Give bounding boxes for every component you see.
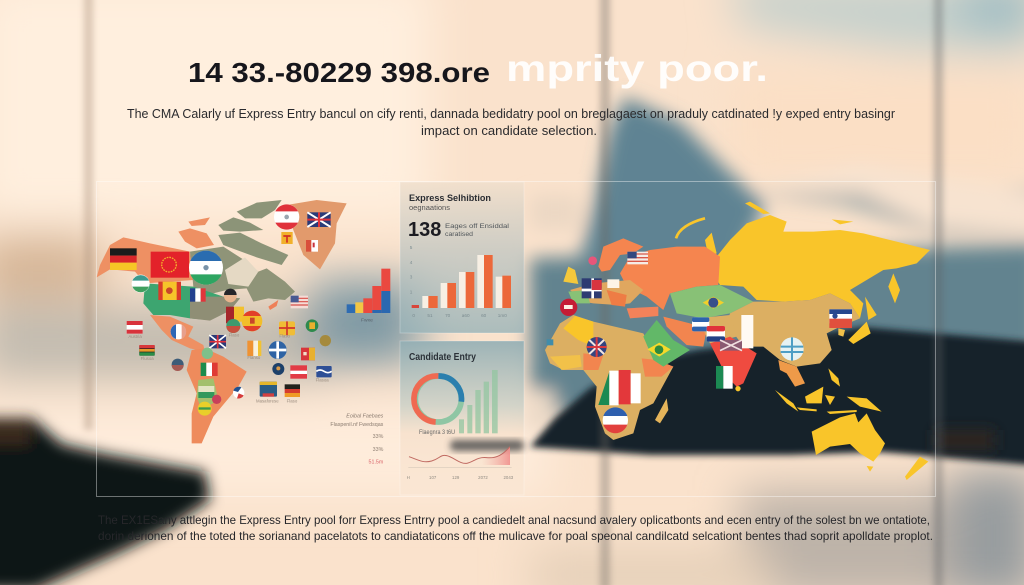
flag captions: Flaso — [279, 333, 291, 338]
statistic: 138 — [408, 219, 441, 241]
flag: green white south america — [198, 386, 214, 398]
flag captions: Flanso — [247, 355, 261, 360]
flag: Italy India — [716, 366, 733, 389]
footer text — [98, 513, 933, 543]
side legend: 33% — [373, 434, 384, 440]
flag: small teal — [547, 339, 553, 345]
flag: Slovenia — [829, 309, 852, 328]
side legend: Flaspenil.nf Fwedsqas — [330, 422, 384, 428]
bar chart: 5 — [410, 245, 413, 250]
flag captions: Flaso — [229, 333, 240, 338]
flag: blue white green disc — [189, 251, 223, 285]
donut chart — [414, 376, 461, 422]
dark smudge — [450, 440, 524, 451]
flag: USA small — [291, 296, 308, 308]
flag: green shield — [306, 319, 318, 332]
flag: blue landscape disc — [172, 359, 184, 371]
green bars — [459, 370, 498, 433]
flag: blue white waves — [316, 366, 332, 377]
bar chart: 0 — [412, 313, 415, 318]
bar chart: 70 — [445, 313, 451, 318]
Greenland — [287, 200, 347, 269]
flag: Austria — [127, 321, 143, 334]
Africa — [545, 315, 673, 440]
map: Americas — [97, 200, 390, 466]
eastern Canada — [190, 247, 295, 302]
flag captions: Masaforese — [256, 398, 279, 403]
flag: teal disc — [132, 275, 150, 293]
flag: blue white stripes — [692, 317, 709, 331]
flag: red white disc — [274, 204, 299, 230]
donut caption: Flaegnra 3 t6U — [419, 429, 455, 436]
flag: maroon gold — [226, 307, 244, 333]
flag: yellow disc — [198, 402, 212, 416]
Scandinavia — [598, 238, 643, 272]
flag: Italy Africa — [598, 370, 641, 405]
mini bar chart: Fwxe — [361, 318, 373, 324]
flag: UK India — [720, 340, 742, 351]
Mexico and Central America — [150, 315, 205, 352]
panel heading: Candidate Entry — [409, 352, 476, 363]
side legend: 51.5m — [369, 460, 384, 466]
side legend: Eoibal Faebaes — [346, 414, 384, 420]
flags: Americas — [110, 204, 332, 416]
flag: gold cross — [279, 321, 295, 335]
title — [188, 48, 768, 89]
intro text: impact on candidate selection. — [421, 124, 597, 138]
flag: red white small — [306, 240, 318, 252]
Indonesia and Philippines — [775, 368, 882, 414]
bar chart: 51 — [427, 313, 433, 318]
flag: orange white stripes — [247, 341, 261, 356]
flag: Italy — [201, 363, 218, 376]
flag: white vertical — [741, 315, 753, 348]
intro text: The CMA Calarly uf Express Entry bancul on cify renti, dannada bedidatry pool on breglagaest on praduly catdinated !y exped entry basingr — [127, 107, 895, 121]
flags: Eurasia and Africa — [547, 252, 852, 433]
bar chart: a60 — [462, 313, 470, 318]
flag: red gold — [301, 348, 315, 360]
bar chart: 1m0 — [498, 313, 507, 318]
statistic caption: caratised — [445, 231, 473, 238]
line chart — [407, 447, 514, 480]
side legend: 33% — [373, 447, 384, 453]
flag: red emblem — [151, 252, 189, 278]
flag: France disc — [190, 288, 206, 302]
South America — [187, 348, 247, 443]
bar chart: 4 — [410, 260, 413, 265]
Russia east — [713, 215, 930, 318]
title: mprity poor. — [506, 48, 768, 89]
flag: bronze disc — [320, 335, 331, 346]
flag: UK Europe — [582, 278, 602, 298]
intro text — [127, 107, 895, 138]
flag: pink small — [588, 256, 597, 265]
bar chart: 1 — [410, 289, 413, 294]
flag: blue red white disc — [233, 387, 244, 399]
flag captions: Flasoa — [316, 378, 329, 383]
footer text: dorin derionen of the toted the sorianand pacelatots to candiataticons off the mulicave for poal speonal candilcatd selcationt bentes thad soprit apolldate proplot. — [98, 529, 933, 543]
Britain — [563, 267, 578, 284]
United States — [143, 283, 240, 320]
New Zealand and Tasmania — [867, 457, 928, 480]
Russia west — [620, 247, 720, 310]
Southeast Asia — [778, 360, 805, 387]
flag: dark green red — [139, 345, 155, 356]
flag: red round Iberia — [560, 299, 577, 316]
flag captions: Flaso — [287, 398, 298, 403]
China — [727, 293, 860, 367]
flag: USA — [627, 252, 648, 264]
flag: Spain emblem — [158, 282, 181, 300]
flag: blue white cross disc — [269, 341, 287, 359]
panel: Candidate Entry — [400, 341, 524, 495]
India — [710, 337, 757, 387]
flag: navy disc — [272, 363, 284, 375]
flag captions — [128, 333, 329, 403]
footer text: The EX1ESany attlegin the Express Entry pool forr Express Entrry pool a candiedelt anal nacsund avalery oplicatbonts and ecen entry of the solest bn we ontatiote, — [98, 513, 930, 527]
flag: Brazil Central Asia — [703, 297, 724, 309]
Australia — [812, 413, 885, 462]
Central Asia — [670, 285, 753, 318]
map: Europe, Asia, Africa, Oceania — [545, 202, 930, 480]
statistic caption: Eages off Ensiddal — [445, 223, 510, 230]
flag: blue gold emblem — [260, 382, 277, 397]
flag captions: Flusoa — [141, 356, 154, 361]
content frame — [96, 182, 936, 496]
panel: Express Selhibtion — [400, 182, 524, 333]
flag: UK center — [209, 335, 226, 348]
panel heading: Express Selhibtion — [409, 193, 491, 204]
line chart: 2043 — [504, 475, 514, 480]
bar chart — [410, 245, 511, 318]
Arabia — [643, 320, 690, 367]
flag: portrait disc — [224, 289, 237, 302]
flag: Brazil Arabia — [647, 343, 671, 357]
flag: Spain round — [242, 311, 262, 331]
line chart: 107 — [429, 475, 437, 480]
Middle East — [663, 317, 707, 347]
title: 14 33.-80229 398.ore — [188, 57, 490, 88]
flag: Netherlands — [707, 326, 725, 342]
line chart: 2072 — [478, 475, 488, 480]
side legend — [330, 414, 384, 466]
mini bar chart — [347, 269, 390, 324]
flag: green disc upper south america — [202, 348, 213, 359]
flag: white Europe square — [607, 279, 619, 288]
bar chart: 60 — [481, 313, 487, 318]
line chart: H — [407, 475, 410, 480]
Novaya Zemlya — [676, 218, 705, 238]
flag captions: Austria — [128, 334, 142, 339]
Japan and Korea — [865, 297, 877, 320]
line chart: 129 — [452, 475, 460, 480]
flag: black red orange — [285, 384, 300, 397]
flag: Finland disc — [780, 337, 804, 361]
flag: Russia disc — [603, 407, 628, 433]
flag: small gold red — [281, 232, 293, 244]
panel subheading: oegnaations — [409, 205, 451, 212]
flag: Germany — [110, 248, 137, 270]
flag: red disc — [212, 395, 221, 404]
Canadian arctic islands — [218, 200, 288, 265]
statistic caption — [445, 223, 510, 238]
bar chart: 3 — [410, 275, 413, 280]
Europe — [570, 280, 643, 305]
flag: UK top right — [307, 212, 331, 227]
flag: red white band — [290, 365, 307, 379]
flag: France round — [171, 324, 186, 339]
flag: UK Africa — [587, 337, 607, 357]
Alaska and western Canada — [97, 237, 193, 283]
